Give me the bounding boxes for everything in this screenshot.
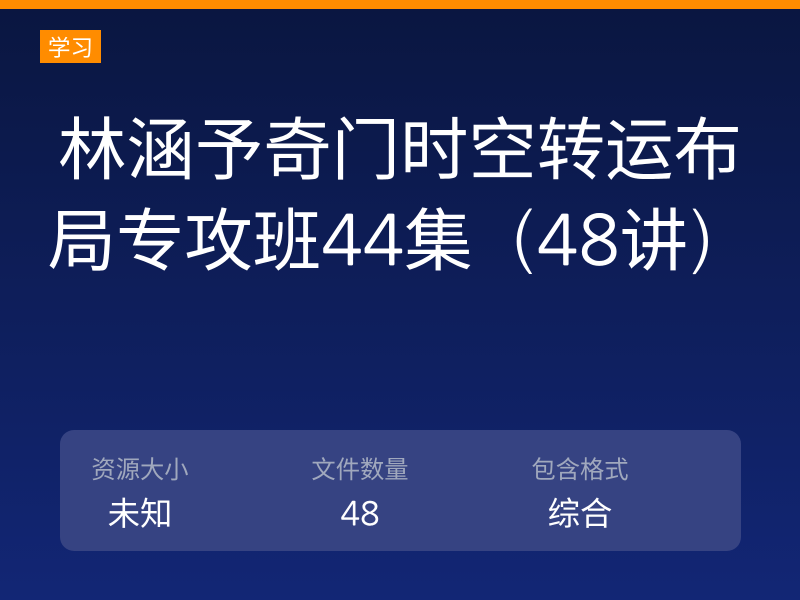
top accent bar (0, 0, 800, 9)
stat: resource size: 未知 (108, 497, 172, 530)
stat: included format: 包含格式 (531, 458, 629, 482)
stat: file count: 48 (340, 497, 380, 530)
stat: file count: 文件数量 (311, 458, 409, 482)
stat: file count (311, 457, 409, 530)
stat: included format: 综合 (548, 497, 612, 530)
title: 林涵予奇门时空转运布局专攻班44集（48讲） (48, 115, 752, 275)
category tag: 学习 (48, 38, 93, 60)
category tag (40, 30, 101, 63)
stat: included format (531, 457, 629, 530)
stat: resource size: 资源大小 (91, 458, 189, 482)
stat: resource size (91, 457, 189, 530)
panel: resource stats (60, 430, 741, 551)
